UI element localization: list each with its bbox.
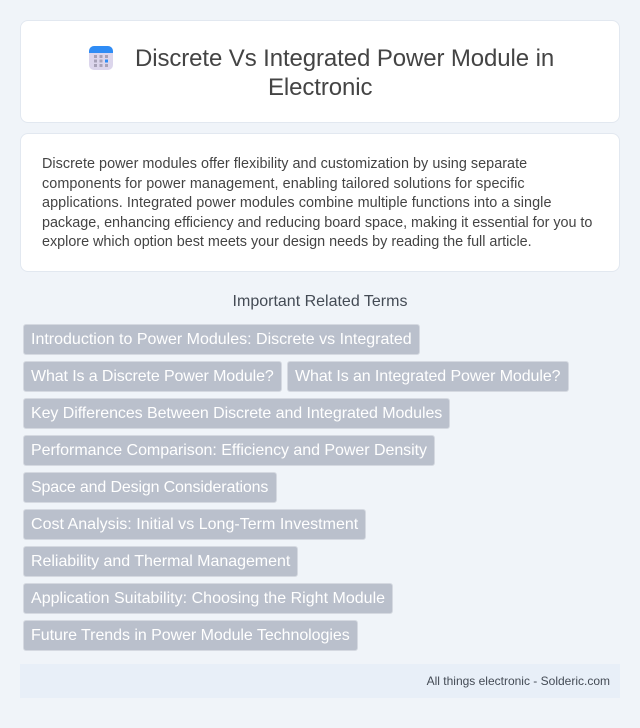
tag [23,435,435,466]
tag: Application Suitability: Choosing the Right Module [31,590,385,607]
tag [23,620,358,651]
tag: Performance Comparison: Efficiency and Power Density [31,442,427,459]
description text: components for power management, enabling tailored solutions for specific [42,176,525,192]
tag [287,361,569,392]
title: Electronic [268,74,372,101]
title [135,45,554,101]
footer text: All things electronic - Solderic.com [427,674,610,688]
tag: Reliability and Thermal Management [31,553,290,570]
tag [23,509,366,540]
tag: Space and Design Considerations [31,479,268,496]
title: Discrete Vs Integrated Power Module in [135,45,554,72]
tag: What Is a Discrete Power Module? [31,368,274,385]
icon: calendar grid [89,46,113,70]
panel: title card [20,20,620,123]
tag list [23,324,569,651]
description text: package, enhancing efficiency and reducing board space, making it essential for you to [42,215,592,231]
tag: What Is an Integrated Power Module? [295,368,560,385]
tag [23,324,420,355]
tag [23,398,450,429]
tag: Future Trends in Power Module Technologies [31,627,350,644]
description text: explore which option best meets your design needs by reading the full article. [42,234,532,250]
tag [23,361,282,392]
tag [23,583,393,614]
tag: Key Differences Between Discrete and Integrated Modules [31,405,442,422]
description text [42,156,592,250]
tag: Cost Analysis: Initial vs Long-Term Investment [31,516,358,533]
tag [23,546,298,577]
description text: Discrete power modules offer flexibility and customization by using separate [42,156,527,172]
panel: description [20,133,620,272]
tag: Introduction to Power Modules: Discrete vs Integrated [31,331,412,348]
tag [23,472,277,503]
description text: applications. Integrated power modules combine multiple functions into a single [42,195,552,211]
heading: related terms: Important Related Terms [233,293,407,310]
footer bar [20,664,620,698]
